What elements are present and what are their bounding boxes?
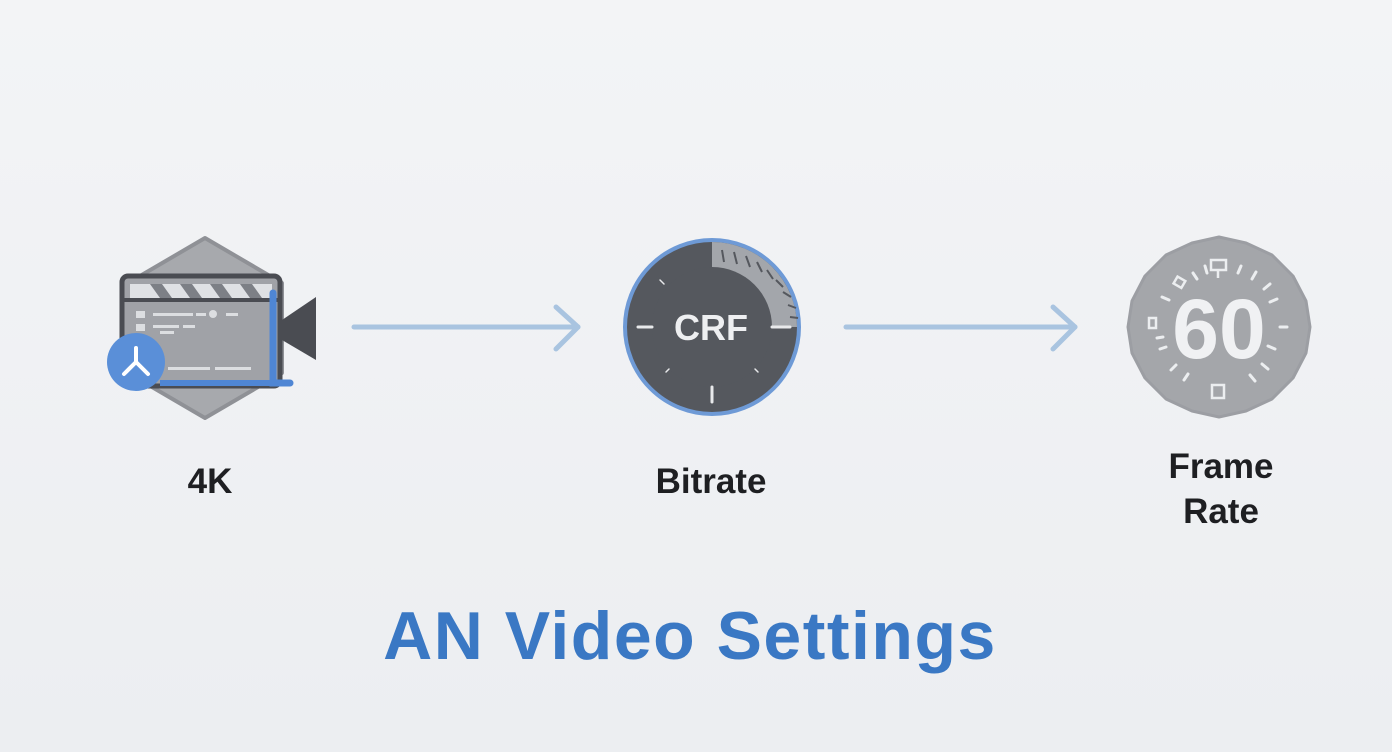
icon: 4K video camera: [107, 238, 316, 418]
icon: CRF dial: CRF: [674, 307, 748, 348]
label: Frame Rate: [1168, 447, 1274, 531]
arrow 2: [846, 307, 1075, 349]
label: Frame Rate: Rate: [1183, 492, 1259, 531]
label: Bitrate: Bitrate: [656, 462, 766, 501]
icon: 60 fps badge: 60: [1172, 282, 1266, 376]
label: Frame Rate: Frame: [1168, 447, 1274, 486]
icon: 60 fps badge: [1128, 237, 1310, 417]
arrow 1: [354, 307, 578, 349]
icon: CRF dial: [625, 240, 799, 414]
label: 4K: 4K: [188, 462, 232, 501]
title: AN Video Settings: [383, 598, 997, 674]
